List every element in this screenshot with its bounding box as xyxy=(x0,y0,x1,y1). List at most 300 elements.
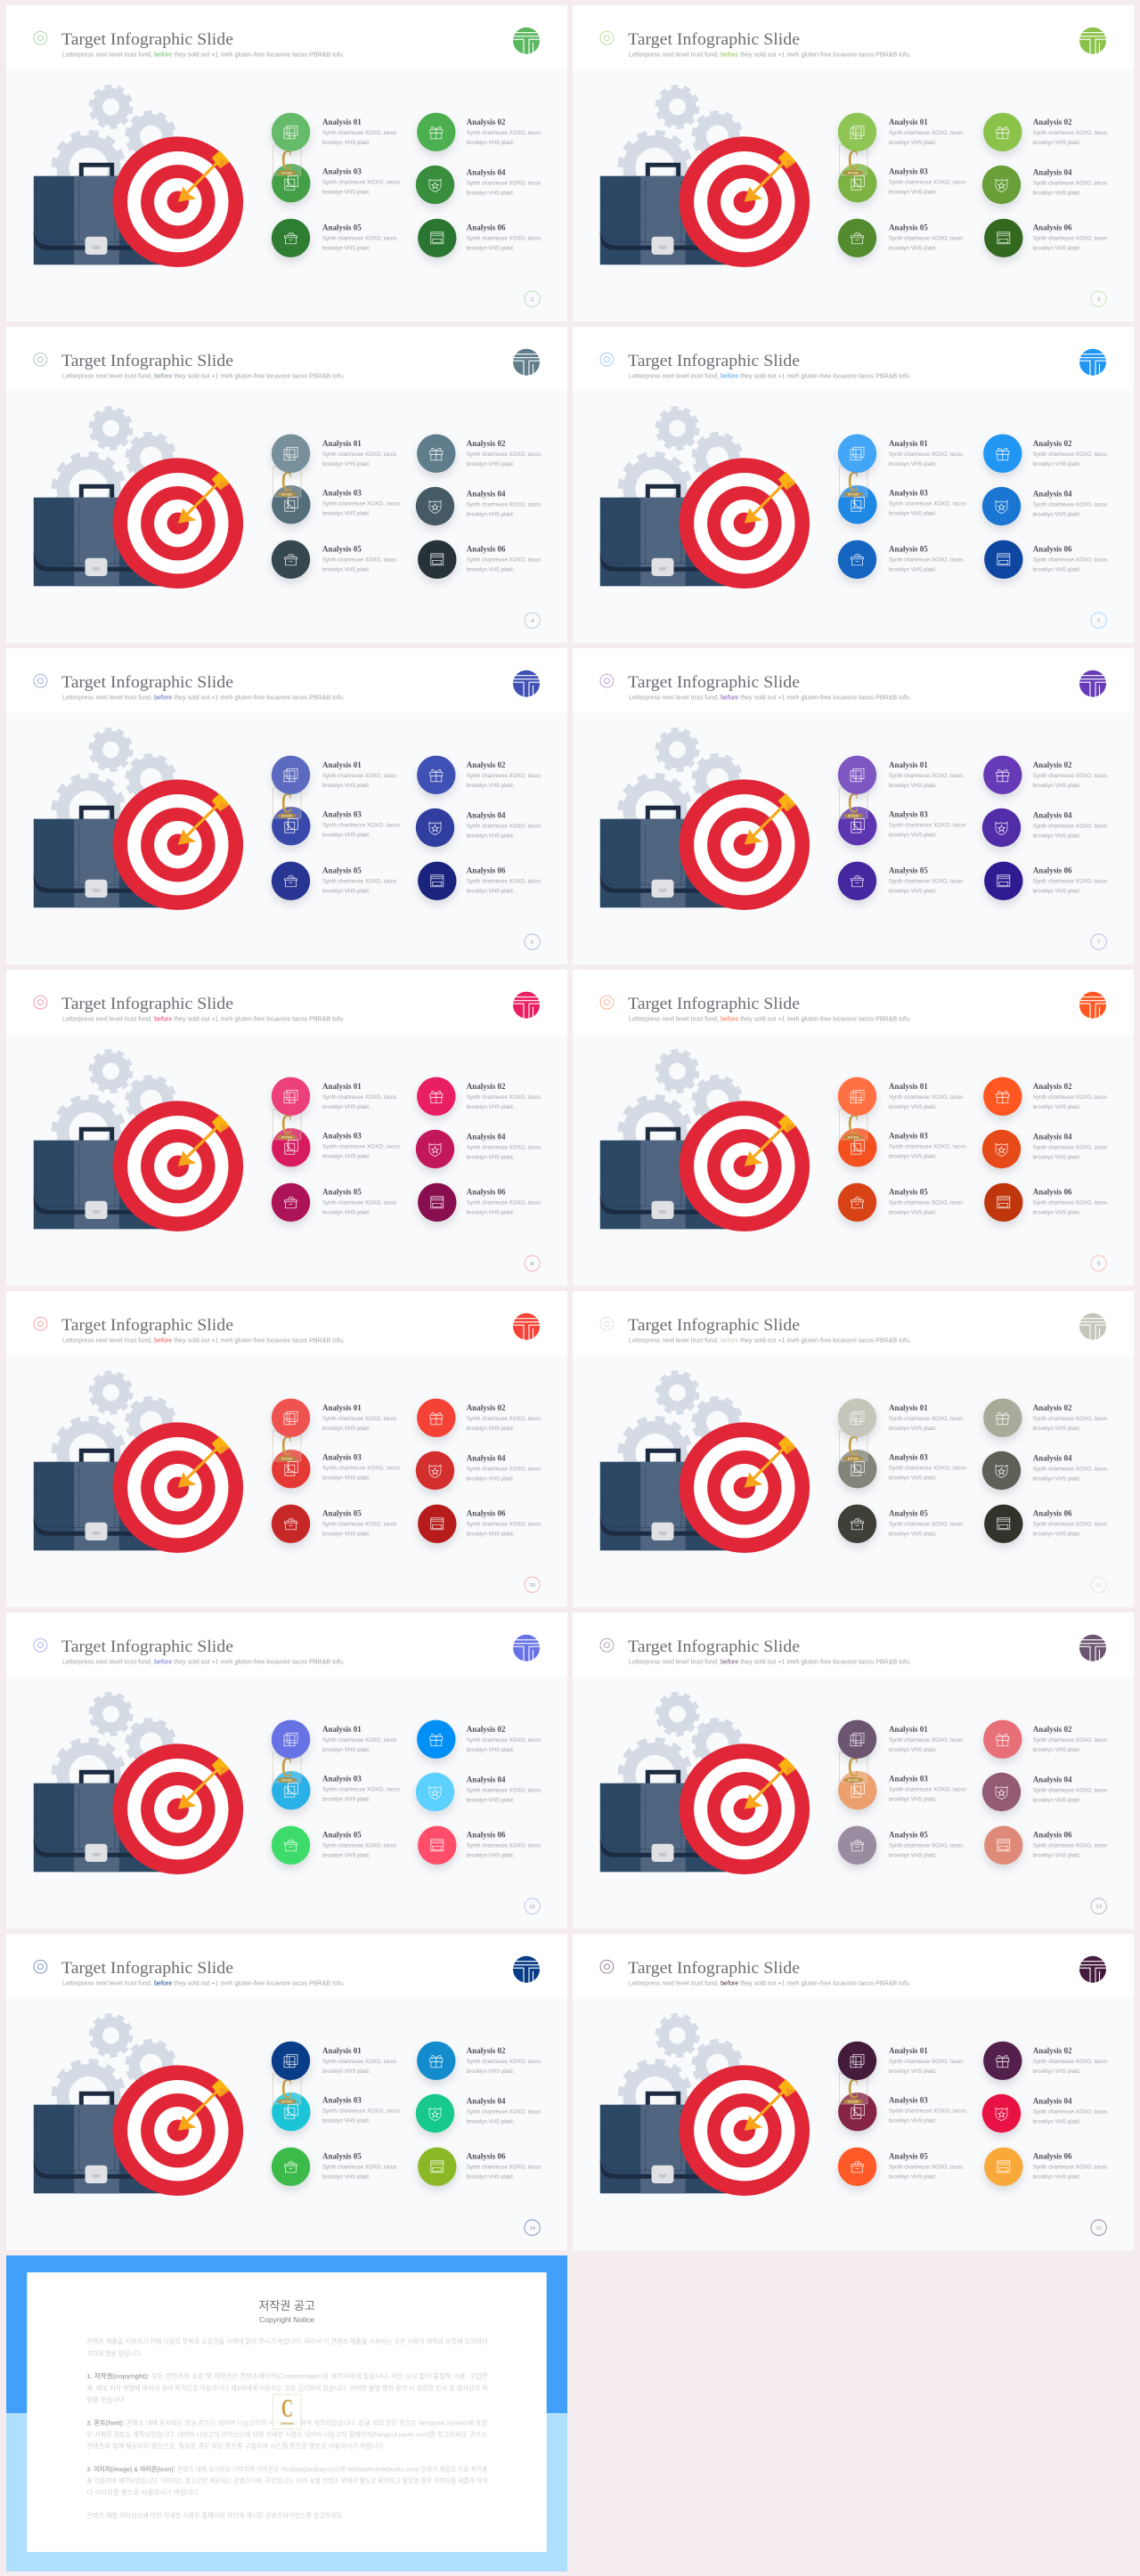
watermark: INTER xyxy=(848,492,859,497)
item: Analysis 03: Synth chartreuse XOXO, tacos xyxy=(889,179,966,185)
item: Analysis 05: Synth chartreuse XOXO, tacos xyxy=(889,557,963,564)
item: Analysis 01 xyxy=(838,1399,963,1437)
illustration xyxy=(600,1051,810,1231)
item: Analysis 03: Analysis 03 xyxy=(889,810,928,819)
icon: briefcase xyxy=(33,808,163,907)
watermark xyxy=(273,2072,301,2104)
icon: gears xyxy=(53,408,175,524)
item: Analysis 06: Analysis 06 xyxy=(1033,1188,1072,1197)
watermark: C xyxy=(848,1429,859,1461)
item: Analysis 06: Analysis 06 xyxy=(1033,223,1072,232)
item: Analysis 04: Analysis 04 xyxy=(466,168,506,177)
item: Analysis 04: Synth chartreuse XOXO, tacos xyxy=(1033,2109,1107,2115)
item: Analysis 04 xyxy=(982,487,1107,525)
item: Analysis 06: Analysis 06 xyxy=(466,1509,506,1518)
watermark: C xyxy=(281,2395,292,2423)
item: Analysis 01 xyxy=(838,756,963,794)
item: Analysis 03: Analysis 03 xyxy=(889,1453,928,1462)
page number xyxy=(524,613,540,628)
item: Analysis 01: brooklyn VHS plaid. xyxy=(322,1426,370,1432)
watermark xyxy=(839,786,867,818)
watermark: C xyxy=(848,465,859,497)
item: Analysis 03 xyxy=(272,1771,399,1809)
item: Analysis 02 xyxy=(983,1077,1107,1116)
icon: briefcase xyxy=(33,165,163,264)
item: Analysis 03: brooklyn VHS plaid. xyxy=(889,1796,937,1802)
item: Analysis 05: Analysis 05 xyxy=(889,223,928,232)
watermark xyxy=(273,1108,301,1140)
item: Analysis 04: Analysis 04 xyxy=(466,811,506,820)
item: Analysis 03 xyxy=(838,807,966,845)
item: Analysis 02: Synth chartreuse XOXO, tacos xyxy=(466,773,541,779)
item: Analysis 06 xyxy=(984,219,1107,257)
watermark: C xyxy=(848,1751,859,1783)
icon: dart arrow xyxy=(745,1758,796,1809)
watermark: C xyxy=(281,143,292,175)
slide 10: red xyxy=(6,1291,567,1607)
item: Analysis 05: brooklyn VHS plaid. xyxy=(322,246,370,252)
item: Analysis 06: Analysis 06 xyxy=(466,1831,506,1840)
item: Analysis 04: brooklyn VHS plaid. xyxy=(1033,1797,1081,1803)
title: Target Infographic Slide xyxy=(628,995,800,1013)
logo xyxy=(513,1635,540,1662)
item: Analysis 05: brooklyn VHS plaid. xyxy=(322,2174,370,2181)
page number xyxy=(524,2220,540,2235)
slide 11: warm grey xyxy=(573,1291,1134,1607)
logo xyxy=(1079,670,1106,697)
item: Analysis 04: brooklyn VHS plaid. xyxy=(466,1154,514,1160)
slide 5: blue xyxy=(573,327,1134,643)
item: Analysis 02 xyxy=(983,2042,1107,2080)
icon: target board xyxy=(679,2065,810,2196)
panel: copyright notice xyxy=(6,2255,567,2572)
illustration xyxy=(33,86,243,267)
item: Analysis 04: Synth chartreuse XOXO, tacos xyxy=(466,1466,541,1472)
watermark: INTER xyxy=(848,1134,859,1140)
item: Analysis 04: Synth chartreuse XOXO, tacos xyxy=(1033,1466,1107,1472)
title: Target Infographic Slide xyxy=(628,352,800,370)
subtitle: Letterpress next level trust fund, before they sold out +1 meh gluten-free locavore tacos PBR&B tofu. xyxy=(62,1657,344,1665)
item: Analysis 03 xyxy=(272,1450,399,1488)
item: Analysis 05: Analysis 05 xyxy=(889,1509,928,1518)
watermark: C xyxy=(848,2072,859,2104)
item: Analysis 06 xyxy=(418,2148,541,2186)
item: Analysis 05 xyxy=(271,1826,396,1865)
item: Analysis 02: Synth chartreuse XOXO, tacos xyxy=(1033,1416,1107,1422)
item: Analysis 04: Analysis 04 xyxy=(466,1454,506,1463)
item: Analysis 01: Synth chartreuse XOXO, tacos xyxy=(889,130,963,136)
item: Analysis 01: brooklyn VHS plaid. xyxy=(322,140,370,146)
item: Analysis 01: Synth chartreuse XOXO, tacos xyxy=(322,773,396,779)
illustration xyxy=(600,1694,810,1874)
item: Analysis 06: Analysis 06 xyxy=(466,223,506,232)
slide 4: blue grey xyxy=(6,327,567,643)
icon: briefcase xyxy=(600,808,730,907)
subtitle: Letterpress next level trust fund, before they sold out +1 meh gluten-free locavore tacos PBR&B tofu. xyxy=(629,1336,911,1344)
item: Analysis 03: Analysis 03 xyxy=(322,167,362,176)
item: Analysis 04: Analysis 04 xyxy=(1033,168,1072,177)
watermark: INTER xyxy=(848,1777,859,1783)
icon: briefcase xyxy=(33,1129,163,1229)
title: Target Infographic Slide xyxy=(61,352,233,370)
item: Analysis 03 xyxy=(838,1771,966,1809)
item: Analysis 01 xyxy=(838,2042,963,2080)
icon: dart arrow xyxy=(177,1758,229,1809)
watermark xyxy=(273,1751,301,1783)
item: Analysis 05: Analysis 05 xyxy=(322,2152,362,2161)
item: Analysis 05: Analysis 05 xyxy=(889,1188,928,1197)
slide 3: light green xyxy=(573,5,1134,321)
item: Analysis 05: Synth chartreuse XOXO, tacos xyxy=(889,236,963,242)
icon: target board xyxy=(112,2065,243,2196)
paragraph: 3 image and icon: 다 이미지를 별도로 사용하시기 바랍니다. xyxy=(86,2488,200,2496)
icon: dart arrow xyxy=(745,1115,796,1166)
item: Analysis 01: brooklyn VHS plaid. xyxy=(322,461,370,467)
item: Analysis 02: brooklyn VHS plaid. xyxy=(466,1426,514,1432)
item: Analysis 06: brooklyn VHS plaid. xyxy=(466,1853,514,1859)
item: Analysis 02: Synth chartreuse XOXO, tacos xyxy=(466,1737,541,1743)
item: Analysis 05: Synth chartreuse XOXO, tacos xyxy=(322,1522,396,1528)
item: Analysis 04 xyxy=(415,1451,541,1490)
item: Analysis 01 xyxy=(271,1399,396,1437)
item: Analysis 03 xyxy=(838,485,966,524)
item: Analysis 04: Synth chartreuse XOXO, tacos xyxy=(1033,823,1107,829)
item: Analysis 06: Analysis 06 xyxy=(1033,866,1072,875)
item: Analysis 06: Synth chartreuse XOXO, tacos xyxy=(466,236,541,242)
page number: 8 xyxy=(530,1261,533,1267)
item: Analysis 03: brooklyn VHS plaid. xyxy=(889,832,937,838)
item: Analysis 01: Analysis 01 xyxy=(889,1725,928,1734)
watermark xyxy=(839,1429,867,1461)
subtitle: Letterpress next level trust fund, before they sold out +1 meh gluten-free locavore tacos PBR&B tofu. xyxy=(62,1336,344,1344)
item: Analysis 03: Synth chartreuse XOXO, tacos xyxy=(889,822,966,828)
illustration xyxy=(600,2015,810,2196)
item: Analysis 06: Synth chartreuse XOXO, tacos xyxy=(1033,1200,1107,1207)
item: Analysis 05: Synth chartreuse XOXO, tacos xyxy=(322,1843,396,1849)
logo xyxy=(513,1956,540,1983)
item: Analysis 04 xyxy=(415,2094,541,2133)
page number xyxy=(1091,1577,1106,1592)
item: Analysis 06 xyxy=(984,540,1107,579)
item: Analysis 02: Synth chartreuse XOXO, tacos xyxy=(466,1094,541,1101)
paragraph: 3 image and icon: 을 이용하여 제작되었습니다. 이미지는 참고로만 제공되는 콘텐츠이며, 무료입니다. 이미 포함 컨텐츠 위해서 별도로 확인하고 필요한 경우 이미지를 새롭게 하여 xyxy=(86,2477,487,2485)
item: Analysis 05: brooklyn VHS plaid. xyxy=(322,567,370,573)
illustration xyxy=(600,86,810,267)
item: Analysis 03: Synth chartreuse XOXO, tacos xyxy=(322,822,399,828)
item: Analysis 05: Analysis 05 xyxy=(889,1831,928,1840)
item: Analysis 05: Synth chartreuse XOXO, tacos xyxy=(889,1843,963,1849)
watermark: C xyxy=(281,1108,292,1140)
item: Analysis 06: Analysis 06 xyxy=(466,866,506,875)
item: Analysis 03: brooklyn VHS plaid. xyxy=(322,510,370,516)
icon: target board xyxy=(112,458,243,589)
item: Analysis 05 xyxy=(838,540,963,579)
title: Target Infographic Slide xyxy=(628,673,800,692)
item: Analysis 04: brooklyn VHS plaid. xyxy=(466,511,514,517)
item: Analysis 05: Analysis 05 xyxy=(322,545,362,554)
item: Analysis 03: Synth chartreuse XOXO, tacos xyxy=(889,1786,966,1792)
watermark: DESIGN xyxy=(280,2421,294,2426)
page number xyxy=(1091,1255,1106,1271)
icon: target mark xyxy=(600,674,614,687)
heading: copyright notice English: Copyright Notice xyxy=(259,2315,314,2324)
item: Analysis 06 xyxy=(418,540,541,579)
icon: dart arrow xyxy=(745,2079,796,2131)
paragraph: 3 image and icon xyxy=(86,2465,487,2496)
item: Analysis 06 xyxy=(418,1826,541,1865)
icon: target board xyxy=(679,1743,810,1874)
item: Analysis 06: brooklyn VHS plaid. xyxy=(466,889,514,895)
item: Analysis 05 xyxy=(271,862,396,900)
item: Analysis 02 xyxy=(983,1720,1107,1759)
icon: gears xyxy=(620,408,741,524)
item: Analysis 04 xyxy=(982,809,1107,847)
item: Analysis 06 xyxy=(984,1183,1107,1222)
watermark: C xyxy=(848,143,859,175)
item: Analysis 04: Synth chartreuse XOXO, tacos xyxy=(466,823,541,829)
item: Analysis 02: Analysis 02 xyxy=(466,2046,506,2055)
item: Analysis 02: brooklyn VHS plaid. xyxy=(466,461,514,467)
icon: briefcase xyxy=(600,1451,730,1550)
watermark: INTER xyxy=(281,814,292,817)
watermark: C xyxy=(281,1429,292,1461)
item: Analysis 05: brooklyn VHS plaid. xyxy=(889,2174,937,2181)
illustration xyxy=(33,729,243,910)
icon: gears xyxy=(620,2015,741,2131)
logo xyxy=(513,28,540,54)
item: Analysis 04: brooklyn VHS plaid. xyxy=(1033,190,1081,196)
item: Analysis 06 xyxy=(984,2148,1107,2186)
item: Analysis 05: Analysis 05 xyxy=(889,545,928,554)
item: Analysis 01: Synth chartreuse XOXO, tacos xyxy=(322,451,396,458)
item: Analysis 03: brooklyn VHS plaid. xyxy=(889,1153,937,1159)
item: Analysis 03: Analysis 03 xyxy=(889,167,928,176)
item: Analysis 04: Synth chartreuse XOXO, tacos xyxy=(466,1144,541,1150)
item: Analysis 06: brooklyn VHS plaid. xyxy=(1033,1532,1081,1538)
item: Analysis 02: Analysis 02 xyxy=(1033,439,1072,448)
item: Analysis 03 xyxy=(272,485,399,524)
item: Analysis 03: Synth chartreuse XOXO, tacos xyxy=(322,500,399,507)
item: Analysis 01 xyxy=(271,2042,396,2080)
item: Analysis 05: Synth chartreuse XOXO, tacos xyxy=(322,2165,396,2171)
icon: target board xyxy=(112,136,243,267)
item: Analysis 06 xyxy=(984,862,1107,900)
item: Analysis 01 xyxy=(271,1077,396,1116)
item: Analysis 03: Synth chartreuse XOXO, tacos xyxy=(322,1143,399,1150)
item: Analysis 06: Analysis 06 xyxy=(1033,2152,1072,2161)
page number: 9 xyxy=(1097,1261,1100,1267)
item: Analysis 05 xyxy=(271,1183,396,1222)
item: Analysis 02: Synth chartreuse XOXO, tacos xyxy=(1033,1737,1107,1743)
item: Analysis 06 xyxy=(984,1826,1107,1865)
item: Analysis 05: brooklyn VHS plaid. xyxy=(322,1532,370,1538)
subtitle: Letterpress next level trust fund, before they sold out +1 meh gluten-free locavore tacos PBR&B tofu. xyxy=(62,50,344,58)
item: Analysis 02: Analysis 02 xyxy=(466,1403,506,1412)
item: Analysis 02 xyxy=(417,435,541,473)
item: Analysis 06: Synth chartreuse XOXO, tacos xyxy=(466,1200,541,1207)
item: Analysis 04 xyxy=(982,1130,1107,1168)
page number: 12 xyxy=(529,1904,534,1910)
item: Analysis 03: Analysis 03 xyxy=(322,810,362,819)
item: Analysis 06: Analysis 06 xyxy=(1033,545,1072,554)
item: Analysis 04 xyxy=(415,166,541,204)
item: Analysis 04: Analysis 04 xyxy=(1033,2097,1072,2106)
icon: target board xyxy=(112,1422,243,1553)
page number xyxy=(1091,934,1106,949)
paragraph: intro: 콘텐츠 제품을 사용하기 전에 다음의 항목과 소유권을 사례에 읽어 주시기 바랍니다. 따라서 이 콘텐츠 제품을 사용하는 것은 사용자 계약과 보증에 유의하여 xyxy=(86,2337,487,2345)
icon: dart arrow xyxy=(177,793,229,845)
icon: target board xyxy=(679,458,810,589)
item: Analysis 03: Synth chartreuse XOXO, tacos xyxy=(889,500,966,507)
item: Analysis 05: Synth chartreuse XOXO, tacos xyxy=(322,879,396,885)
item: Analysis 05: Analysis 05 xyxy=(889,2152,928,2161)
item: Analysis 03: brooklyn VHS plaid. xyxy=(322,2117,370,2124)
title: Target Infographic Slide xyxy=(61,30,233,49)
item: Analysis 05: Analysis 05 xyxy=(322,1831,362,1840)
item: Analysis 01: Synth chartreuse XOXO, tacos xyxy=(322,1416,396,1422)
item: Analysis 03 xyxy=(838,1450,966,1488)
item: Analysis 02: brooklyn VHS plaid. xyxy=(1033,1747,1081,1753)
page number xyxy=(1091,613,1106,628)
item: Analysis 03: Analysis 03 xyxy=(889,489,928,498)
item: Analysis 06: Analysis 06 xyxy=(466,545,506,554)
title: Target Infographic Slide xyxy=(61,1959,233,1978)
paragraph: 1 copyright: 벌을 받습니다. xyxy=(86,2396,126,2404)
watermark xyxy=(273,2394,301,2429)
icon: gears xyxy=(53,86,175,202)
item: Analysis 02: Synth chartreuse XOXO, tacos xyxy=(1033,2059,1107,2065)
item: Analysis 04: Analysis 04 xyxy=(1033,1454,1072,1463)
item: Analysis 03: Synth chartreuse XOXO, tacos xyxy=(322,1465,399,1471)
icon: target mark xyxy=(600,353,614,366)
item: Analysis 06: brooklyn VHS plaid. xyxy=(466,2174,514,2181)
item: Analysis 02: brooklyn VHS plaid. xyxy=(1033,1426,1081,1432)
watermark: C xyxy=(848,1108,859,1140)
item: Analysis 05: Synth chartreuse XOXO, tacos xyxy=(322,1200,396,1207)
watermark: INTER xyxy=(281,2100,292,2103)
item: Analysis 05: Synth chartreuse XOXO, tacos xyxy=(889,1522,963,1528)
paragraph: 3 image and icon: 3. 이미지(image) & 아이콘(icon): 콘텐츠 내에 표시되는 이미지와 아이콘은 Pixabay(pixabay.com)와 Wikibooks(wikibooks.com) 등에서 제공된 무료 저작물 xyxy=(86,2465,487,2473)
item: Analysis 03: brooklyn VHS plaid. xyxy=(322,1475,370,1481)
item: Analysis 03: Synth chartreuse XOXO, tacos xyxy=(322,2108,399,2114)
item: Analysis 04 xyxy=(415,1130,541,1168)
item: Analysis 04: Analysis 04 xyxy=(466,490,506,499)
item: Analysis 04: Synth chartreuse XOXO, tacos xyxy=(1033,501,1107,508)
logo xyxy=(513,1313,540,1340)
icon: gears xyxy=(620,1051,741,1166)
page number xyxy=(524,291,540,306)
item: Analysis 01: Analysis 01 xyxy=(322,2046,362,2055)
item: Analysis 02: brooklyn VHS plaid. xyxy=(1033,461,1081,467)
icon: briefcase xyxy=(33,486,163,586)
page number xyxy=(524,1255,540,1271)
item: Analysis 01: Synth chartreuse XOXO, tacos xyxy=(322,2059,396,2065)
icon: dart arrow xyxy=(745,150,796,202)
icon: gears xyxy=(53,1694,175,1809)
item: Analysis 04: Synth chartreuse XOXO, tacos xyxy=(1033,1787,1107,1793)
item: Analysis 03: Synth chartreuse XOXO, tacos xyxy=(322,179,399,185)
item: Analysis 04: Synth chartreuse XOXO, tacos xyxy=(1033,1144,1107,1150)
item: Analysis 03: Analysis 03 xyxy=(889,1132,928,1141)
item: Analysis 01: Analysis 01 xyxy=(889,2046,928,2055)
item: Analysis 02: Synth chartreuse XOXO, tacos xyxy=(466,130,541,136)
item: Analysis 05 xyxy=(838,1505,963,1543)
item: Analysis 04: Analysis 04 xyxy=(466,1776,506,1784)
item: Analysis 02: brooklyn VHS plaid. xyxy=(466,783,514,789)
item: Analysis 03: brooklyn VHS plaid. xyxy=(322,1796,370,1802)
item: Analysis 04 xyxy=(982,1773,1107,1811)
icon: target mark xyxy=(34,1638,46,1652)
item: Analysis 03: brooklyn VHS plaid. xyxy=(889,1475,937,1481)
slide 8: pink xyxy=(6,970,567,1286)
item: Analysis 01: Analysis 01 xyxy=(889,1403,928,1412)
item: Analysis 05: Synth chartreuse XOXO, tacos xyxy=(889,2165,963,2171)
item: Analysis 04: brooklyn VHS plaid. xyxy=(1033,1154,1081,1160)
item: Analysis 04: brooklyn VHS plaid. xyxy=(1033,2118,1081,2125)
watermark xyxy=(839,2072,867,2104)
icon: target mark xyxy=(34,995,46,1009)
watermark: INTER xyxy=(281,171,292,175)
item: Analysis 04: brooklyn VHS plaid. xyxy=(1033,833,1081,839)
item: Analysis 06: brooklyn VHS plaid. xyxy=(466,567,514,573)
item: Analysis 01: Analysis 01 xyxy=(889,439,928,448)
slide 9: deep orange xyxy=(573,970,1134,1286)
item: Analysis 02: Analysis 02 xyxy=(1033,1725,1072,1734)
page number xyxy=(524,934,540,949)
item: Analysis 01: brooklyn VHS plaid. xyxy=(889,1426,937,1432)
subtitle: Letterpress next level trust fund, before they sold out +1 meh gluten-free locavore tacos PBR&B tofu. xyxy=(629,50,911,58)
illustration xyxy=(600,1372,810,1553)
icon: dart arrow xyxy=(745,1436,796,1488)
icon: target board xyxy=(679,136,810,267)
item: Analysis 02: Synth chartreuse XOXO, tacos xyxy=(466,1416,541,1422)
item: Analysis 01: Analysis 01 xyxy=(322,118,362,126)
item: Analysis 03: brooklyn VHS plaid. xyxy=(322,189,370,195)
item: Analysis 05: brooklyn VHS plaid. xyxy=(889,246,937,252)
item: Analysis 03: Analysis 03 xyxy=(322,1453,362,1462)
title: Target Infographic Slide xyxy=(628,1637,800,1656)
item: Analysis 03 xyxy=(838,164,966,202)
page number: 2 xyxy=(530,297,533,303)
item: Analysis 01 xyxy=(838,113,963,151)
item: Analysis 03: Synth chartreuse XOXO, tacos xyxy=(889,2108,966,2114)
page number: 5 xyxy=(1097,618,1100,624)
icon: target board xyxy=(112,779,243,910)
item: Analysis 03 xyxy=(838,1128,966,1166)
icon: dart arrow xyxy=(177,1436,229,1488)
item: Analysis 06 xyxy=(418,862,541,900)
title: Target Infographic Slide xyxy=(61,1316,233,1335)
item: Analysis 01: Synth chartreuse XOXO, tacos xyxy=(889,2059,963,2065)
item: Analysis 03: Analysis 03 xyxy=(322,489,362,498)
item: Analysis 05: brooklyn VHS plaid. xyxy=(322,1853,370,1859)
item: Analysis 01: Synth chartreuse XOXO, tacos xyxy=(322,1737,396,1743)
item: Analysis 01: brooklyn VHS plaid. xyxy=(322,1747,370,1753)
page number: 14 xyxy=(529,2225,535,2231)
heading: copyright notice Korean: 저작권 공고 xyxy=(258,2299,314,2312)
item: Analysis 02: Analysis 02 xyxy=(466,439,506,448)
item: Analysis 06: brooklyn VHS plaid. xyxy=(1033,889,1081,895)
item: Analysis 06: Analysis 06 xyxy=(1033,1509,1072,1518)
item: Analysis 01: brooklyn VHS plaid. xyxy=(322,1104,370,1110)
item: Analysis 06: Analysis 06 xyxy=(466,1188,506,1197)
icon: dart arrow xyxy=(177,150,229,202)
logo xyxy=(1079,349,1106,376)
item: Analysis 02: Analysis 02 xyxy=(466,118,506,126)
watermark xyxy=(273,465,301,497)
paragraph: intro: 귀하의 법을 알립니다. xyxy=(86,2349,142,2357)
subtitle: Letterpress next level trust fund, before they sold out +1 meh gluten-free locavore tacos PBR&B tofu. xyxy=(62,1014,344,1022)
